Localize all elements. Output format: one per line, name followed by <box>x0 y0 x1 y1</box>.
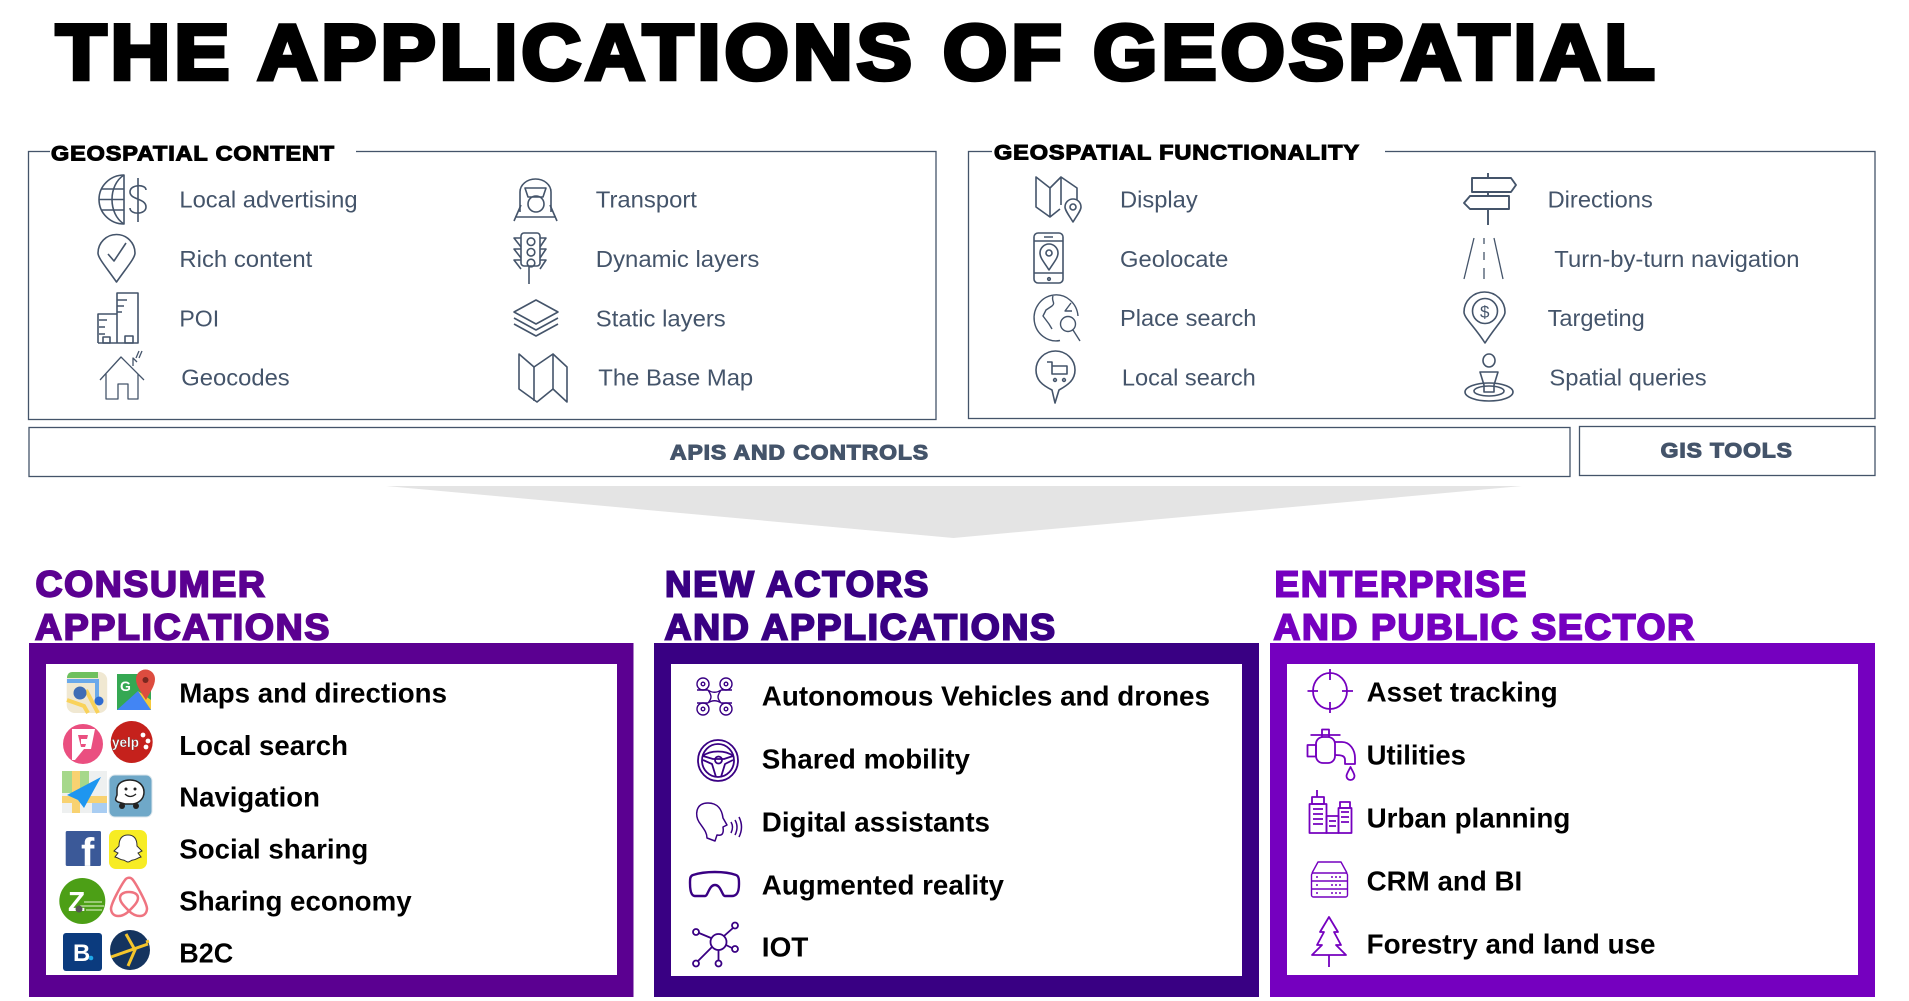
label: directions: Directions <box>1548 187 1653 213</box>
panel: consumer applications <box>29 643 634 997</box>
label: sharing economy: Sharing economy <box>179 886 412 917</box>
label: dynamic layers: Dynamic layers <box>596 246 759 272</box>
icon: yelp logo <box>111 721 153 763</box>
icon: IOT network <box>693 922 738 966</box>
icon: zipcar logo <box>59 878 105 924</box>
heading: consumer applications: CONSUMER <box>36 564 266 605</box>
icon: globe with magnifier <box>1034 295 1080 341</box>
label: utilities: Utilities <box>1367 739 1466 770</box>
icon: dollar pin <box>1464 292 1505 343</box>
icon: apple maps logo <box>67 672 107 713</box>
icon: spatial query figure <box>1465 354 1513 401</box>
icon: expedia logo <box>110 930 150 970</box>
label: social sharing: Social sharing <box>179 834 368 865</box>
icon: google maps logo: G <box>120 678 131 694</box>
panel: geospatial functionality <box>968 142 1875 418</box>
icon: phone with pin <box>1034 233 1063 283</box>
title: THE APPLICATIONS OF GEOSPATIAL <box>56 8 1659 96</box>
arrow: downward grey wedge <box>386 486 1522 538</box>
icon: city buildings <box>1310 790 1352 833</box>
label: POI: POI <box>179 306 219 332</box>
label: geolocate: Geolocate <box>1120 246 1228 272</box>
heading: geospatial content: GEOSPATIAL CONTENT <box>51 142 335 166</box>
heading: new actors and applications: NEW ACTORS <box>665 564 930 605</box>
icon: crosshair <box>1308 669 1353 713</box>
icon: airbnb logo <box>111 878 147 916</box>
bar: GIS tools <box>1580 426 1875 476</box>
icon: facebook logo: f <box>81 831 95 875</box>
label: maps and directions: Maps and directions <box>179 678 447 709</box>
label: local search: Local search <box>179 730 348 761</box>
icon: pin with check <box>98 235 135 282</box>
panel: new actors and applications <box>654 643 1259 997</box>
label: asset tracking: Asset tracking <box>1367 677 1558 708</box>
label: spatial queries: Spatial queries <box>1549 365 1707 391</box>
icon: drone <box>697 678 732 715</box>
icon: traffic light <box>514 233 546 284</box>
label: rich content: Rich content <box>179 246 313 272</box>
heading: enterprise and public sector: AND PUBLIC SECTOR <box>1274 607 1696 648</box>
label: static layers: Static layers <box>596 306 726 332</box>
icon: yelp logo: yelp <box>112 735 139 750</box>
icon: booking logo: B <box>73 940 90 967</box>
label: autonomous vehicles and drones: Autonomous Vehicles and drones <box>762 681 1210 712</box>
icon: train <box>514 179 557 221</box>
icon: foursquare logo <box>63 724 103 764</box>
icon: steering wheel <box>698 740 738 781</box>
icon: globe and dollar <box>99 175 146 224</box>
label: turn-by-turn navigation: Turn-by-turn navigation <box>1554 246 1800 272</box>
label: B2C: B2C <box>179 937 233 968</box>
heading: geospatial functionality: GEOSPATIAL FUNCTIONALITY <box>994 142 1360 164</box>
heading: consumer applications <box>35 564 331 648</box>
label: place search: Place search <box>1120 305 1256 331</box>
label: local search: Local search <box>1122 365 1256 391</box>
icon: dollar pin: $ <box>1480 302 1490 322</box>
heading: new actors and applications: AND APPLICATIONS <box>664 607 1057 648</box>
bar: APIs and controls: APIS AND CONTROLS <box>670 442 929 464</box>
icon: map with pin <box>1036 177 1081 222</box>
icon: talking head <box>697 803 742 841</box>
bar: GIS tools: GIS TOOLS <box>1661 440 1793 463</box>
heading: enterprise and public sector <box>1274 564 1696 648</box>
icon: navigation app logo <box>62 771 107 813</box>
label: targeting: Targeting <box>1548 305 1645 331</box>
icon: booking logo <box>63 933 102 971</box>
icon: cart in bubble <box>1036 351 1075 403</box>
icon: zipcar logo: Z <box>68 886 85 917</box>
icon: folded map <box>519 354 567 402</box>
panel: geospatial content <box>28 142 936 420</box>
label: IOT: IOT <box>762 932 808 963</box>
icon: house <box>100 351 144 399</box>
icon: signpost <box>1464 173 1516 225</box>
icon: snapchat logo <box>109 830 147 869</box>
label: shared mobility: Shared mobility <box>762 743 970 774</box>
heading: new actors and applications <box>664 564 1057 648</box>
icon: layers <box>514 300 558 336</box>
label: geocodes: Geocodes <box>181 365 290 391</box>
icon: road <box>1464 238 1503 279</box>
icon: waze logo <box>109 775 152 817</box>
heading: enterprise and public sector: ENTERPRISE <box>1274 564 1528 605</box>
label: forestry and land use: Forestry and land use <box>1367 929 1656 960</box>
icon: google maps logo <box>117 670 155 710</box>
label: augmented reality: Augmented reality <box>762 869 1004 900</box>
label: CRM and BI: CRM and BI <box>1367 866 1522 897</box>
label: digital assistants: Digital assistants <box>762 806 990 837</box>
icon: AR goggles <box>690 872 739 896</box>
label: navigation: Navigation <box>179 782 320 813</box>
heading: consumer applications: APPLICATIONS <box>35 607 331 648</box>
bar: APIs and controls <box>29 428 1570 476</box>
icon: server <box>1312 862 1348 897</box>
label: transport: Transport <box>596 187 698 213</box>
icon: facebook logo <box>66 831 101 875</box>
icon: pine tree <box>1312 917 1346 967</box>
label: urban planning: Urban planning <box>1367 803 1570 834</box>
label: display: Display <box>1120 187 1198 213</box>
icon: buildings <box>98 293 138 343</box>
label: the base map: The Base Map <box>598 365 753 391</box>
label: local advertising: Local advertising <box>179 187 358 213</box>
icon: water tap <box>1308 730 1355 780</box>
panel: enterprise and public sector <box>1270 643 1875 997</box>
